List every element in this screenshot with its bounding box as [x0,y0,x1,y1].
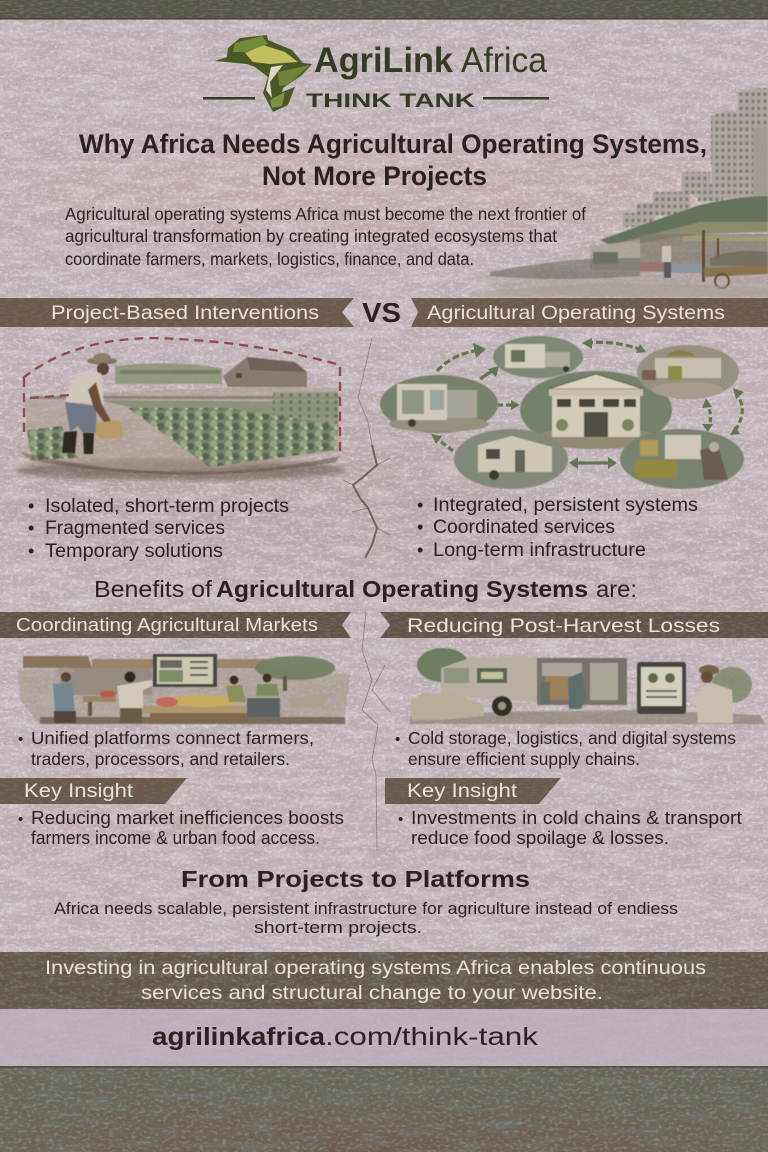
figure: technician [688,665,733,723]
comparison header band [0,297,768,328]
VS badge: VS [362,297,401,328]
bullet list: project-based: Isolated, short-term projects [45,495,289,517]
truck and store [441,656,627,716]
bullet list: operating systems [417,494,698,561]
hub: small cold store [454,429,568,489]
hub: agro dealer with people [620,429,744,489]
hub: delivery truck [493,336,583,378]
title: Not More Projects [262,161,487,191]
bullet list: project-based: Temporary solutions [45,540,223,562]
section text [54,900,678,937]
insight text: markets: farmers income & urban food access. [31,828,320,848]
benefit text: markets: Unified platforms connect farmers, [31,728,314,748]
insight text: markets: • [18,811,23,828]
key insight tag: post-harvest: Key Insight [407,781,518,802]
insight text: markets [18,808,344,848]
key insight tag: post-harvest [385,778,561,804]
benefits heading: Benefits of [94,576,213,602]
insight text: post-harvest: Investments in cold chains & transport [411,808,742,828]
banner: reducing post-harvest losses [380,612,768,638]
benefit text: markets: traders, processors, and retailers. [31,749,290,769]
figure: farmer [62,353,123,454]
banner: reducing post-harvest losses: Reducing Post-Harvest Losses [407,615,720,637]
bullet list: project-based: • [28,496,34,516]
brand name: Africa [461,41,548,80]
illustration: farmer in project plot [15,338,345,481]
section heading: from projects to platforms: From Projects to Platforms [181,866,530,892]
illustration: city and street market skyline [470,88,768,297]
produce stall [83,690,280,724]
banner: coordinating agricultural markets: Coordinating Agricultural Markets [16,614,318,635]
benefit text: post-harvest [395,728,736,769]
key insight tag: markets [0,778,187,804]
benefit text: post-harvest: • [395,731,400,748]
hub: storage unit [380,375,498,433]
hub: market stall truck [637,345,739,399]
rocks [411,692,484,720]
bottom dark band [0,1066,768,1152]
logo: AgriLink Africa Think Tank [203,35,549,112]
call to action band [0,952,768,1009]
title: Why Africa Needs Agricultural Operating Systems, [79,129,707,159]
intro text: coordinate farmers, markets, logistics, finance, and data. [65,249,474,269]
benefits heading: are: [596,576,637,602]
crack: upper central fissure [343,338,390,558]
tablet [637,662,686,714]
section text: short-term projects. [254,919,422,937]
benefit text: post-harvest: ensure efficient supply chains. [408,749,640,769]
bullet list: operating systems: • [417,495,423,515]
intro text [65,204,586,269]
intro text: agricultural transformation by creating integrated ecosystems that [65,226,557,246]
intro text: Agricultural operating systems Africa must become the next frontier of [65,204,586,224]
section text: Africa needs scalable, persistent infrastructure for agriculture instead of endiess [54,900,678,918]
insight text: post-harvest: reduce food spoilage & losses. [411,828,669,848]
icon: Africa map tree [215,35,312,112]
figure: traders [53,668,279,723]
bullet list: operating systems: Long-term infrastructure [433,539,646,561]
dashed project boundary [23,338,340,452]
bullet list: operating systems: • [417,540,423,560]
insight text: post-harvest: • [398,811,403,828]
hub: central building [520,371,672,449]
think tank subtitle: THINK TANK [306,90,475,112]
insight text: post-harvest [398,808,742,848]
title [79,129,707,191]
website band: .com/think-tank [325,1023,539,1051]
top dark band [0,0,768,20]
benefit text: markets: • [18,731,23,748]
banner: project-based interventions [0,298,354,327]
brand name [314,41,548,80]
bullet list: project-based [28,495,289,562]
screen [153,654,217,687]
bullet list: project-based: • [28,518,34,538]
website band: agrilinkafrica [152,1023,326,1051]
benefits heading: Agricultural Operating Systems [216,576,588,602]
benefit text: markets [18,728,314,769]
illustration: truck, cold store and tablet [410,648,765,724]
banner: coordinating agricultural markets [0,612,351,638]
call to action band: services and structural change to your website. [141,982,603,1004]
banner: agricultural operating systems: Agricultural Operating Systems [427,302,725,324]
benefit text: post-harvest: Cold storage, logistics, and digital systems [408,728,736,748]
bullet list: operating systems: Integrated, persistent systems [433,494,698,516]
illustration: market coordination scene [18,654,350,724]
crack: lower central fissure [362,612,390,850]
arrows between hubs [435,342,742,463]
illustration: connected operating system hubs [380,336,744,489]
call to action band: Investing in agricultural operating systems Africa enables continuous [45,957,706,979]
bullet list: operating systems: Coordinated services [433,516,615,538]
banner: agricultural operating systems [411,298,768,327]
bullet list: project-based: • [28,541,34,561]
brand name: AgriLink [314,41,454,80]
benefits heading [94,576,637,602]
banner: project-based interventions: Project-Based Interventions [51,302,319,324]
bullet list: operating systems: • [417,517,423,537]
insight text: markets: Reducing market inefficiences boosts [31,808,344,828]
key insight tag: markets: Key Insight [24,781,134,802]
bullet list: project-based: Fragmented services [45,517,225,539]
website band [0,1009,768,1066]
arrowheads [431,338,744,469]
benefits header bands [0,612,768,638]
